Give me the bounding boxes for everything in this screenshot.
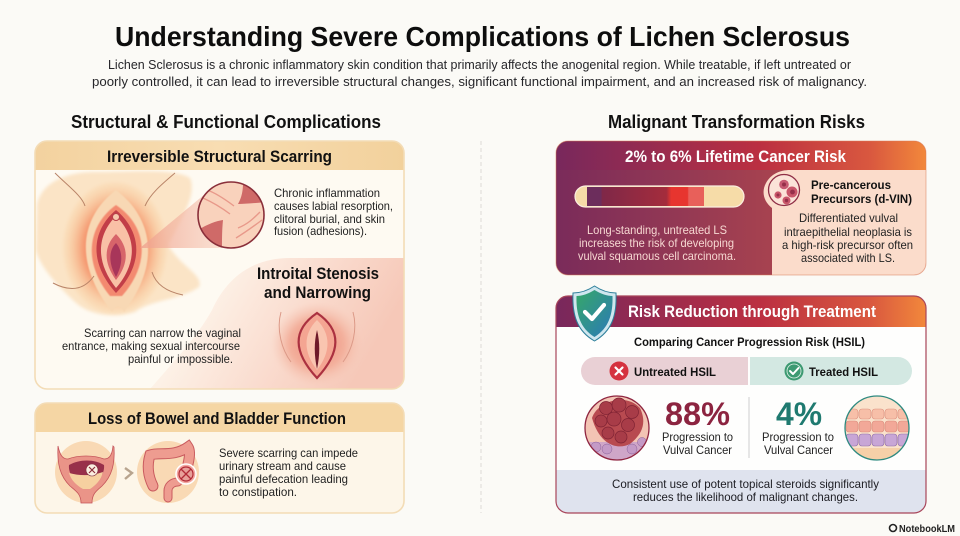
text: chronic inflammation: clitoral burial, and skin	[274, 212, 385, 226]
text: chronic inflammation: fusion (adhesions).	[274, 224, 367, 238]
stat: 4 percent	[762, 396, 834, 457]
panel header	[556, 296, 926, 327]
illustration: diseased tissue cells	[585, 396, 649, 460]
stat: 88 percent: Vulval Cancer	[663, 443, 732, 457]
footer band	[556, 470, 926, 513]
icon: colon	[137, 441, 199, 503]
text: scarring narrows entrance: painful or impossible.	[128, 352, 233, 366]
text: long-standing LS	[578, 223, 736, 263]
icon: bladder	[55, 441, 117, 503]
text: treatment note: reduces the likelihood of malignant changes.	[633, 490, 858, 504]
subheading: pre-cancerous precursors: Pre-cancerous	[811, 178, 891, 192]
text: scarring narrows entrance	[62, 326, 241, 366]
logo: NotebookLM: NotebookLM	[899, 524, 955, 535]
text: differentiated neoplasia: a high-risk precursor often	[782, 238, 913, 252]
subheading: introital stenosis: and Narrowing	[264, 284, 371, 302]
subheading: pre-cancerous precursors: Precursors (d-VIN)	[811, 192, 912, 206]
risk bar	[575, 186, 744, 207]
text: urinary and defecation	[219, 446, 358, 499]
panel title: Irreversible Structural Scarring	[107, 148, 332, 166]
text: differentiated neoplasia: Differentiated vulval	[799, 211, 898, 225]
stat: 4 percent: 4%	[776, 396, 822, 432]
text: chronic inflammation	[274, 186, 393, 238]
title: Understanding Severe Complications of Lichen Sclerosus	[115, 21, 850, 52]
panel: irreversible structural scarring	[35, 141, 404, 389]
text: differentiated neoplasia: intraepithelial neoplasia is	[784, 225, 912, 239]
text: chronic inflammation: causes labial resorption,	[274, 199, 393, 213]
comparison pill: untreated	[581, 357, 748, 385]
comparison pill: treated: Treated HSIL	[809, 365, 878, 379]
illustration: narrowing diagram	[276, 306, 356, 380]
intro text: poorly controlled, it can lead to irreversible structural changes, significant functional impairment, and an increased risk of malignancy.	[92, 75, 867, 89]
stat: 88 percent: 88%	[665, 396, 730, 432]
panel: lifetime cancer risk	[556, 141, 926, 275]
icon: cell cluster	[768, 174, 800, 206]
text: differentiated neoplasia	[782, 211, 913, 265]
subheading: introital stenosis	[257, 265, 379, 302]
text: treatment note	[612, 477, 879, 504]
intro text	[92, 58, 867, 89]
text: urinary and defecation: urinary stream and cause	[219, 459, 346, 473]
panel: loss of bowel and bladder function	[35, 403, 404, 513]
icon: shield with check	[573, 286, 616, 341]
icon: arrow chevron	[125, 468, 132, 479]
subheading: pre-cancerous precursors	[811, 178, 912, 206]
text: treatment note: Consistent use of potent topical steroids significantly	[612, 477, 879, 491]
text: scarring narrows entrance: Scarring can narrow the vaginal	[84, 326, 241, 340]
text: differentiated neoplasia: associated with LS.	[801, 251, 895, 265]
illustration: anatomical diagram, scarring	[36, 171, 200, 315]
text: long-standing LS: increases the risk of developing	[579, 236, 734, 250]
text: urinary and defecation: painful defecation leading	[219, 472, 348, 486]
heading: malignant transformation risks: Malignant Transformation Risks	[608, 112, 865, 132]
illustration: magnified inset circle	[198, 182, 266, 250]
panel title: 2% to 6% Lifetime Cancer Risk	[625, 148, 847, 166]
subheading: introital stenosis: Introital Stenosis	[257, 265, 379, 283]
comparison pill: treated	[750, 357, 912, 385]
text: chronic inflammation: Chronic inflammation	[274, 186, 380, 200]
stat: 88 percent	[662, 396, 733, 457]
intro text: Lichen Sclerosus is a chronic inflammatory skin condition that primarily affects the anogenital region. While treatable, if left untreated or	[108, 58, 851, 72]
panel header	[35, 141, 404, 170]
text: urinary and defecation: to constipation.	[219, 485, 297, 499]
stat: 88 percent: Progression to	[662, 430, 733, 444]
illustration: healthy tissue cells	[845, 396, 910, 461]
heading: structural and functional complications: Structural & Functional Complications	[71, 112, 381, 132]
pink stenosis background	[150, 258, 404, 389]
text: urinary and defecation: Severe scarring can impede	[219, 446, 358, 460]
stat: 4 percent: Vulval Cancer	[764, 443, 833, 457]
text: scarring narrows entrance: entrance, making sexual intercourse	[62, 339, 240, 353]
panel title: Risk Reduction through Treatment	[628, 303, 876, 321]
text: long-standing LS: vulval squamous cell carcinoma.	[578, 249, 736, 263]
comparison pill: untreated: Untreated HSIL	[634, 365, 716, 379]
callout: pre-cancerous background	[764, 170, 926, 275]
panel header	[556, 141, 926, 170]
text: long-standing LS: Long-standing, untreated LS	[587, 223, 727, 237]
stat: 4 percent: Progression to	[762, 430, 834, 444]
callout wedge	[140, 194, 226, 248]
panel title: Loss of Bowel and Bladder Function	[88, 410, 346, 428]
subheading: comparing risk: Comparing Cancer Progression Risk (HSIL)	[634, 335, 865, 349]
panel: risk reduction through treatment	[556, 286, 926, 513]
